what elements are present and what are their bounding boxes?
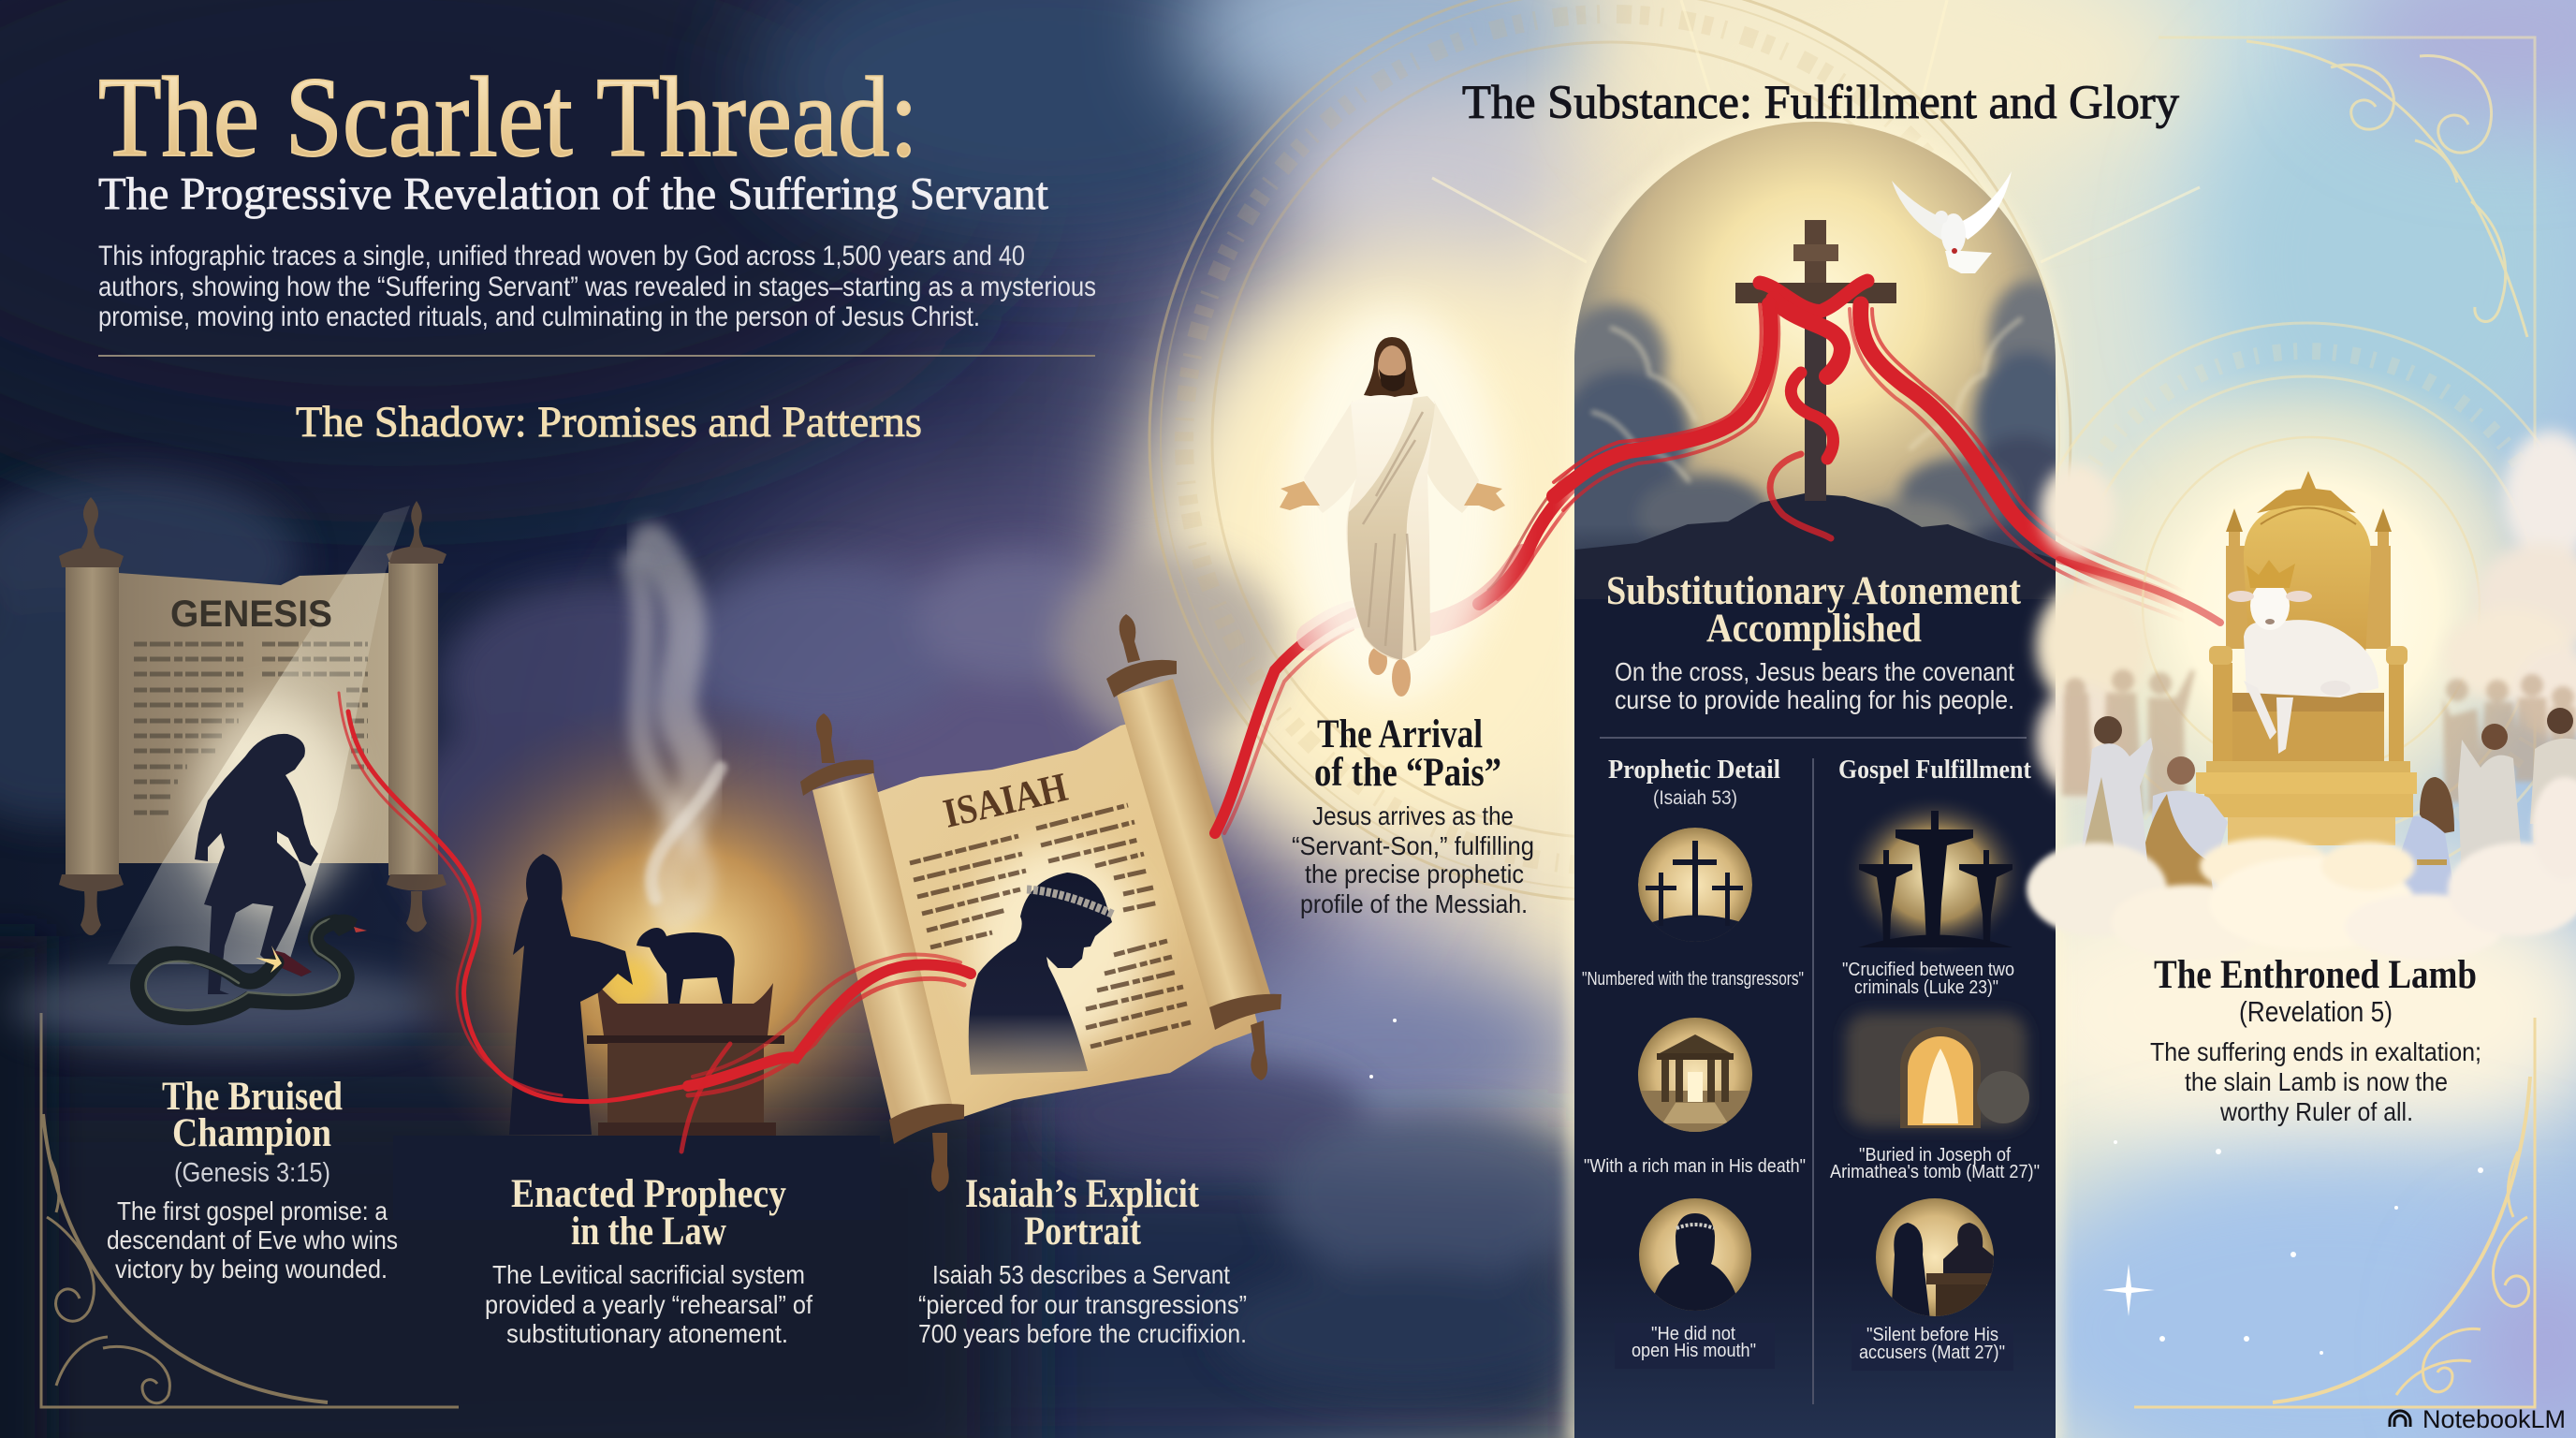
- drape: [1348, 396, 1435, 660]
- cross: [1735, 220, 1896, 501]
- hands: [1280, 481, 1320, 510]
- quote box: silent: accusers (Matt 27)": [1859, 1343, 2005, 1363]
- text: enacted prophecy: The Levitical sacrificial system: [492, 1260, 805, 1289]
- clouds behind: [2036, 431, 2576, 796]
- quote box: did not open: open His mouth": [1632, 1341, 1756, 1361]
- intro text: [98, 241, 1096, 332]
- central arch panel: [1554, 122, 2223, 1438]
- text: the enthroned lamb: (Revelation 5): [2239, 995, 2393, 1028]
- heading: the substance: The Substance: Fulfillment and Glory: [1462, 77, 2179, 129]
- priest silhouette: [509, 854, 633, 1135]
- quote: buried: Arimathea's tomb (Matt 27)": [1830, 1162, 2040, 1182]
- text: enacted prophecy: [485, 1172, 812, 1348]
- worshipper left: [2094, 716, 2122, 744]
- text: the enthroned lamb: The suffering ends in exaltation;: [2150, 1037, 2481, 1066]
- quote: crucified: "Crucified between two: [1842, 960, 2014, 980]
- worshipper far right: [2547, 708, 2573, 734]
- column heading: prophetic detail: Prophetic Detail: [1608, 756, 1780, 785]
- scarlet cloth on cross: [1554, 281, 2223, 635]
- scroll title: GENESIS: [170, 594, 332, 635]
- hair: [1364, 337, 1418, 397]
- figure: crowned sufferer silhouette: [969, 873, 1112, 1075]
- text: enacted prophecy: substitutionary atonement.: [506, 1319, 788, 1348]
- clouds inside arch: [1574, 273, 2056, 551]
- scroll body text lines: [910, 805, 1191, 1047]
- icon: three crucifixes: [1841, 793, 2028, 958]
- column heading: prophetic detail: [1608, 756, 1780, 809]
- lamb: [2228, 560, 2378, 754]
- panel description: On the cross, Jesus bears the covenant: [1615, 657, 2014, 686]
- text: the bruised champion: victory by being wounded.: [115, 1255, 388, 1284]
- panel description: [1615, 657, 2014, 714]
- smoke: [632, 543, 721, 913]
- text: Isaiah's explicit portrait: Isaiah 53 describes a Servant: [932, 1260, 1230, 1289]
- text: the arrival: The Arrival: [1317, 712, 1483, 756]
- ornamental halo rings behind throne: [2021, 323, 2576, 894]
- logo: NotebookLM: NotebookLM: [2422, 1405, 2566, 1433]
- subtitle: The Progressive Revelation of the Suffering Servant: [98, 168, 1048, 219]
- lamb crown: [2247, 560, 2295, 588]
- text: the enthroned lamb: [2150, 953, 2481, 1126]
- illustration: altar and priest: [393, 543, 973, 1220]
- quote: numbered: "Numbered with the transgressors": [1582, 969, 1804, 990]
- text: the arrival: the precise prophetic: [1305, 859, 1524, 888]
- scroll body text lines: [134, 644, 368, 813]
- hill: [1575, 493, 2056, 599]
- column heading: prophetic detail: (Isaiah 53): [1653, 787, 1737, 809]
- illustration: enthroned lamb: [2027, 360, 2576, 960]
- left roller: [800, 713, 964, 1192]
- icon: three crosses medallion: [1638, 828, 1755, 942]
- text: Isaiah's explicit portrait: “pierced for our transgressions”: [918, 1290, 1247, 1319]
- sleeves: [1304, 401, 1363, 513]
- light rays: [1432, 0, 2200, 262]
- text: the bruised champion: (Genesis 3:15): [174, 1158, 330, 1188]
- halo glow: [2058, 360, 2564, 857]
- robe: [1346, 395, 1435, 660]
- title block: [98, 54, 1096, 357]
- text: Isaiah's explicit portrait: 700 years before the crucifixion.: [918, 1319, 1247, 1348]
- corner ornament: bottom right: [2134, 1018, 2535, 1407]
- text: the arrival: Jesus arrives as the: [1312, 801, 1514, 830]
- intro text: This infographic traces a single, unified thread woven by God across 1,500 years and 40: [98, 241, 1025, 271]
- quote box: silent: "Silent before His: [1866, 1325, 1998, 1345]
- worshipper right: [2481, 724, 2508, 750]
- text: Isaiah's explicit portrait: [918, 1172, 1247, 1348]
- lamb silhouette: [637, 928, 735, 1004]
- column heading: gospel fulfillment: Gospel Fulfillment: [1838, 756, 2032, 785]
- text: the enthroned lamb: the slain Lamb is now the: [2185, 1067, 2448, 1096]
- quote: buried: [1830, 1145, 2040, 1182]
- scarlet thread: shadow section: [339, 693, 971, 1152]
- quote box: did not open: [1615, 1323, 1775, 1369]
- throne: [2196, 471, 2417, 845]
- scarlet thread: to the arrival: [1215, 459, 1605, 833]
- icon: open tomb: [1846, 1013, 2029, 1128]
- crown of thorns: [1027, 889, 1114, 915]
- text: the enthroned lamb: The Enthroned Lamb: [2154, 953, 2477, 997]
- ribbon end over clouds: [2059, 560, 2220, 623]
- panel heading: Substitutionary Atonement: [1606, 569, 2022, 613]
- clouds: [2027, 777, 2576, 960]
- text: the arrival: “Servant-Son,” fulfilling: [1292, 831, 1534, 860]
- worshipper front man: [2167, 756, 2195, 785]
- ornamental halo ring behind Jesus: [1149, 0, 2071, 901]
- quote box: did not open: "He did not: [1651, 1324, 1735, 1344]
- text: enacted prophecy: Enacted Prophecy: [511, 1172, 786, 1216]
- quote: buried: "Buried in Joseph of: [1859, 1145, 2011, 1166]
- title: The Scarlet Thread:: [98, 54, 918, 181]
- text: the arrival: [1292, 712, 1534, 918]
- text: the bruised champion: The Bruised: [162, 1075, 343, 1119]
- text: the bruised champion: Champion: [172, 1111, 331, 1155]
- illustration: Genesis scroll and bruised champion: [9, 497, 446, 1049]
- parchment: [847, 712, 1259, 1123]
- intro text: promise, moving into enacted rituals, and culminating in the person of Jesus Christ.: [98, 301, 980, 332]
- text: the enthroned lamb: worthy Ruler of all.: [2219, 1097, 2413, 1126]
- quote: crucified: criminals (Luke 23)": [1854, 977, 1998, 998]
- quote box: silent: [1852, 1324, 2013, 1371]
- corner ornament: top right: [2159, 37, 2535, 843]
- dove: [1892, 171, 2012, 273]
- sparkles: [1369, 1019, 2483, 1355]
- icon: silent figure medallion: [1639, 1198, 1751, 1311]
- text: the arrival: profile of the Messiah.: [1300, 889, 1528, 918]
- corner ornament: bottom left: [41, 1013, 459, 1407]
- right roller: [1106, 614, 1281, 1080]
- text: Isaiah's explicit portrait: Portrait: [1024, 1210, 1142, 1254]
- text: enacted prophecy: provided a yearly “rehearsal” of: [485, 1290, 812, 1319]
- light beam: [108, 506, 410, 964]
- scroll title: ISAIAH: [939, 764, 1072, 837]
- heading: the shadow: The Shadow: Promises and Patterns: [296, 398, 922, 447]
- text: the bruised champion: descendant of Eve who wins: [107, 1225, 398, 1255]
- altar: [587, 983, 784, 1136]
- figure: Jesus, the arrival: [1280, 309, 1505, 702]
- panel description: curse to provide healing for his people.: [1615, 685, 2014, 714]
- background clouds: [0, 473, 1591, 1395]
- intro text: authors, showing how the “Suffering Servant” was revealed in stages–starting as a mysterious: [98, 271, 1096, 302]
- worshippers foreground: [2080, 708, 2576, 917]
- panel heading: [1606, 569, 2022, 651]
- face: [1378, 345, 1406, 389]
- text: Isaiah's explicit portrait: Isaiah’s Explicit: [965, 1172, 1200, 1216]
- illustration: Isaiah scroll: [800, 614, 1281, 1192]
- worshippers background: [2062, 669, 2576, 814]
- text: the bruised champion: [107, 1075, 398, 1284]
- quote: crucified: [1842, 960, 2014, 998]
- quote: rich man: "With a rich man in His death": [1584, 1156, 1806, 1177]
- icon: silent before accusers: [1876, 1198, 1998, 1322]
- panel heading: Accomplished: [1706, 607, 1922, 651]
- text: enacted prophecy: in the Law: [571, 1210, 726, 1254]
- text: the bruised champion: The first gospel promise: a: [117, 1196, 388, 1225]
- worshipper woman: [2420, 777, 2454, 835]
- feet: [1368, 647, 1387, 675]
- text: the arrival: of the “Pais”: [1314, 751, 1501, 795]
- scroll: Genesis: [9, 497, 446, 1049]
- figure: champion silhouette: [195, 734, 318, 994]
- figure: serpent: [139, 919, 346, 1018]
- icon: rich man's temple medallion: [1638, 1018, 1752, 1137]
